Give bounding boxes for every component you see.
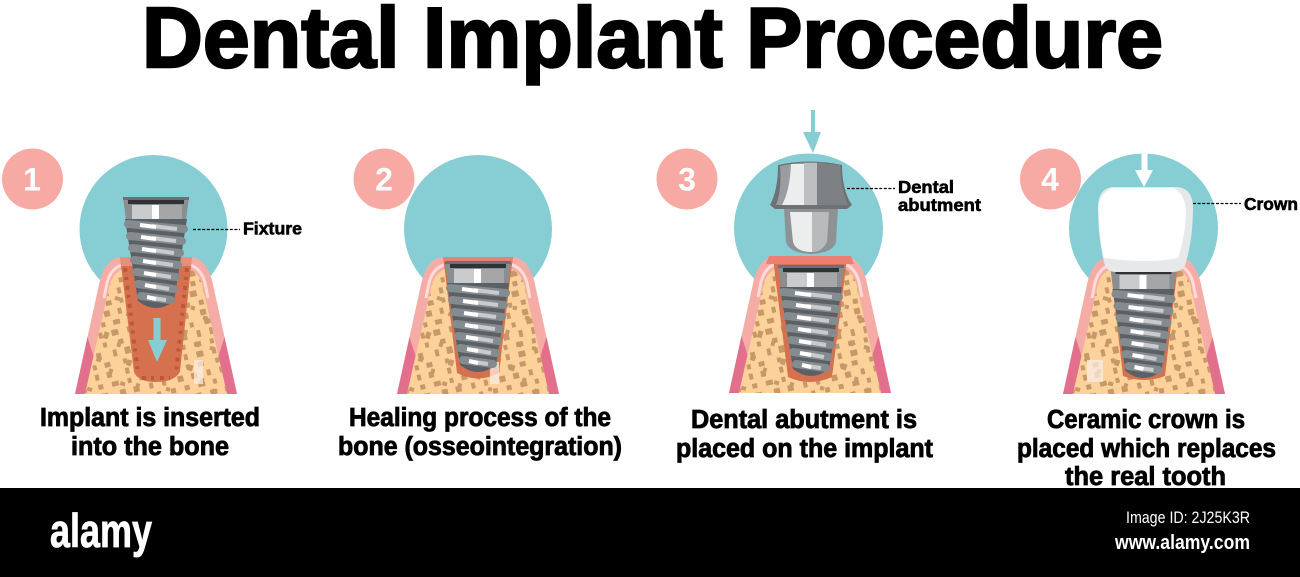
step 4 caption: the real tooth: [1065, 463, 1226, 491]
step 2 jaw bone with healed socket: [363, 214, 593, 448]
step 4 implant fixture: [1110, 267, 1176, 378]
step 4 teal circle: [1069, 154, 1218, 302]
footer bar: [0, 488, 1300, 577]
panel: step 1: [2, 148, 302, 461]
step 1 caption: into the bone: [71, 433, 229, 461]
panel: step 3: [656, 110, 981, 463]
step 4 caption: placed which replaces: [1017, 435, 1276, 463]
step 3 abutment: [770, 162, 852, 254]
step 4 crown leader line: [1193, 202, 1241, 204]
panel: step 2: [338, 148, 622, 461]
step 1 implant fixture: [123, 197, 189, 308]
step 2 caption: [338, 404, 622, 461]
step 1 downward arrow: [148, 318, 167, 362]
step 3 number badge: [656, 148, 718, 210]
step 3 caption: placed on the implant: [676, 435, 933, 463]
step 3 caption: [676, 406, 933, 463]
step 2 caption: Healing process of the: [349, 404, 611, 432]
step 3 jaw bone with socket: [695, 213, 925, 447]
step 3 caption: Dental abutment is: [691, 406, 917, 434]
step 4 crown label: Crown: [1244, 194, 1298, 214]
step 3 abutment label: Dental: [898, 177, 954, 197]
step 2 caption: bone (osseointegration): [338, 433, 622, 461]
step 1 fixture leader line: [193, 228, 240, 230]
step 3 abutment leader line: [847, 188, 895, 190]
step 4 jaw bone with socket: [1029, 214, 1259, 448]
step 1 fixture label: Fixture: [243, 218, 302, 238]
step 2 teal circle: [404, 155, 552, 303]
step 4 caption: Ceramic crown is: [1047, 406, 1245, 434]
step 3 number badge: 3: [678, 162, 696, 198]
step 2 number badge: 2: [375, 162, 393, 198]
footer image id: Image ID: 2J25K3R: [1126, 508, 1250, 527]
step 2 number badge: [354, 148, 414, 210]
footer logo: alamy: [50, 504, 152, 557]
step 4 caption: [1017, 406, 1276, 491]
step 1 caption: [40, 404, 260, 461]
step 1 number badge: 1: [23, 162, 41, 198]
step 3 implant fixture: [778, 265, 844, 376]
footer url: www.alamy.com: [1114, 532, 1250, 554]
step 1 caption: Implant is inserted: [40, 404, 260, 432]
step 4 ceramic crown: [1098, 187, 1193, 272]
step 4 number badge: [1020, 148, 1081, 210]
step 3 abutment label: [898, 177, 981, 215]
panel: step 4: [1017, 148, 1298, 491]
step 4 white arrow: [1135, 153, 1153, 187]
step 1 jaw bone with socket: [41, 214, 271, 448]
step 1 number badge: [2, 148, 63, 210]
step 3 downward arrow: [803, 110, 821, 153]
step 3 teal circle: [734, 154, 883, 302]
step 3 abutment label: abutment: [898, 195, 981, 215]
step 1 teal circle: [80, 155, 228, 303]
step 4 number badge: 4: [1041, 162, 1059, 198]
step 2 implant fixture: [445, 261, 511, 372]
